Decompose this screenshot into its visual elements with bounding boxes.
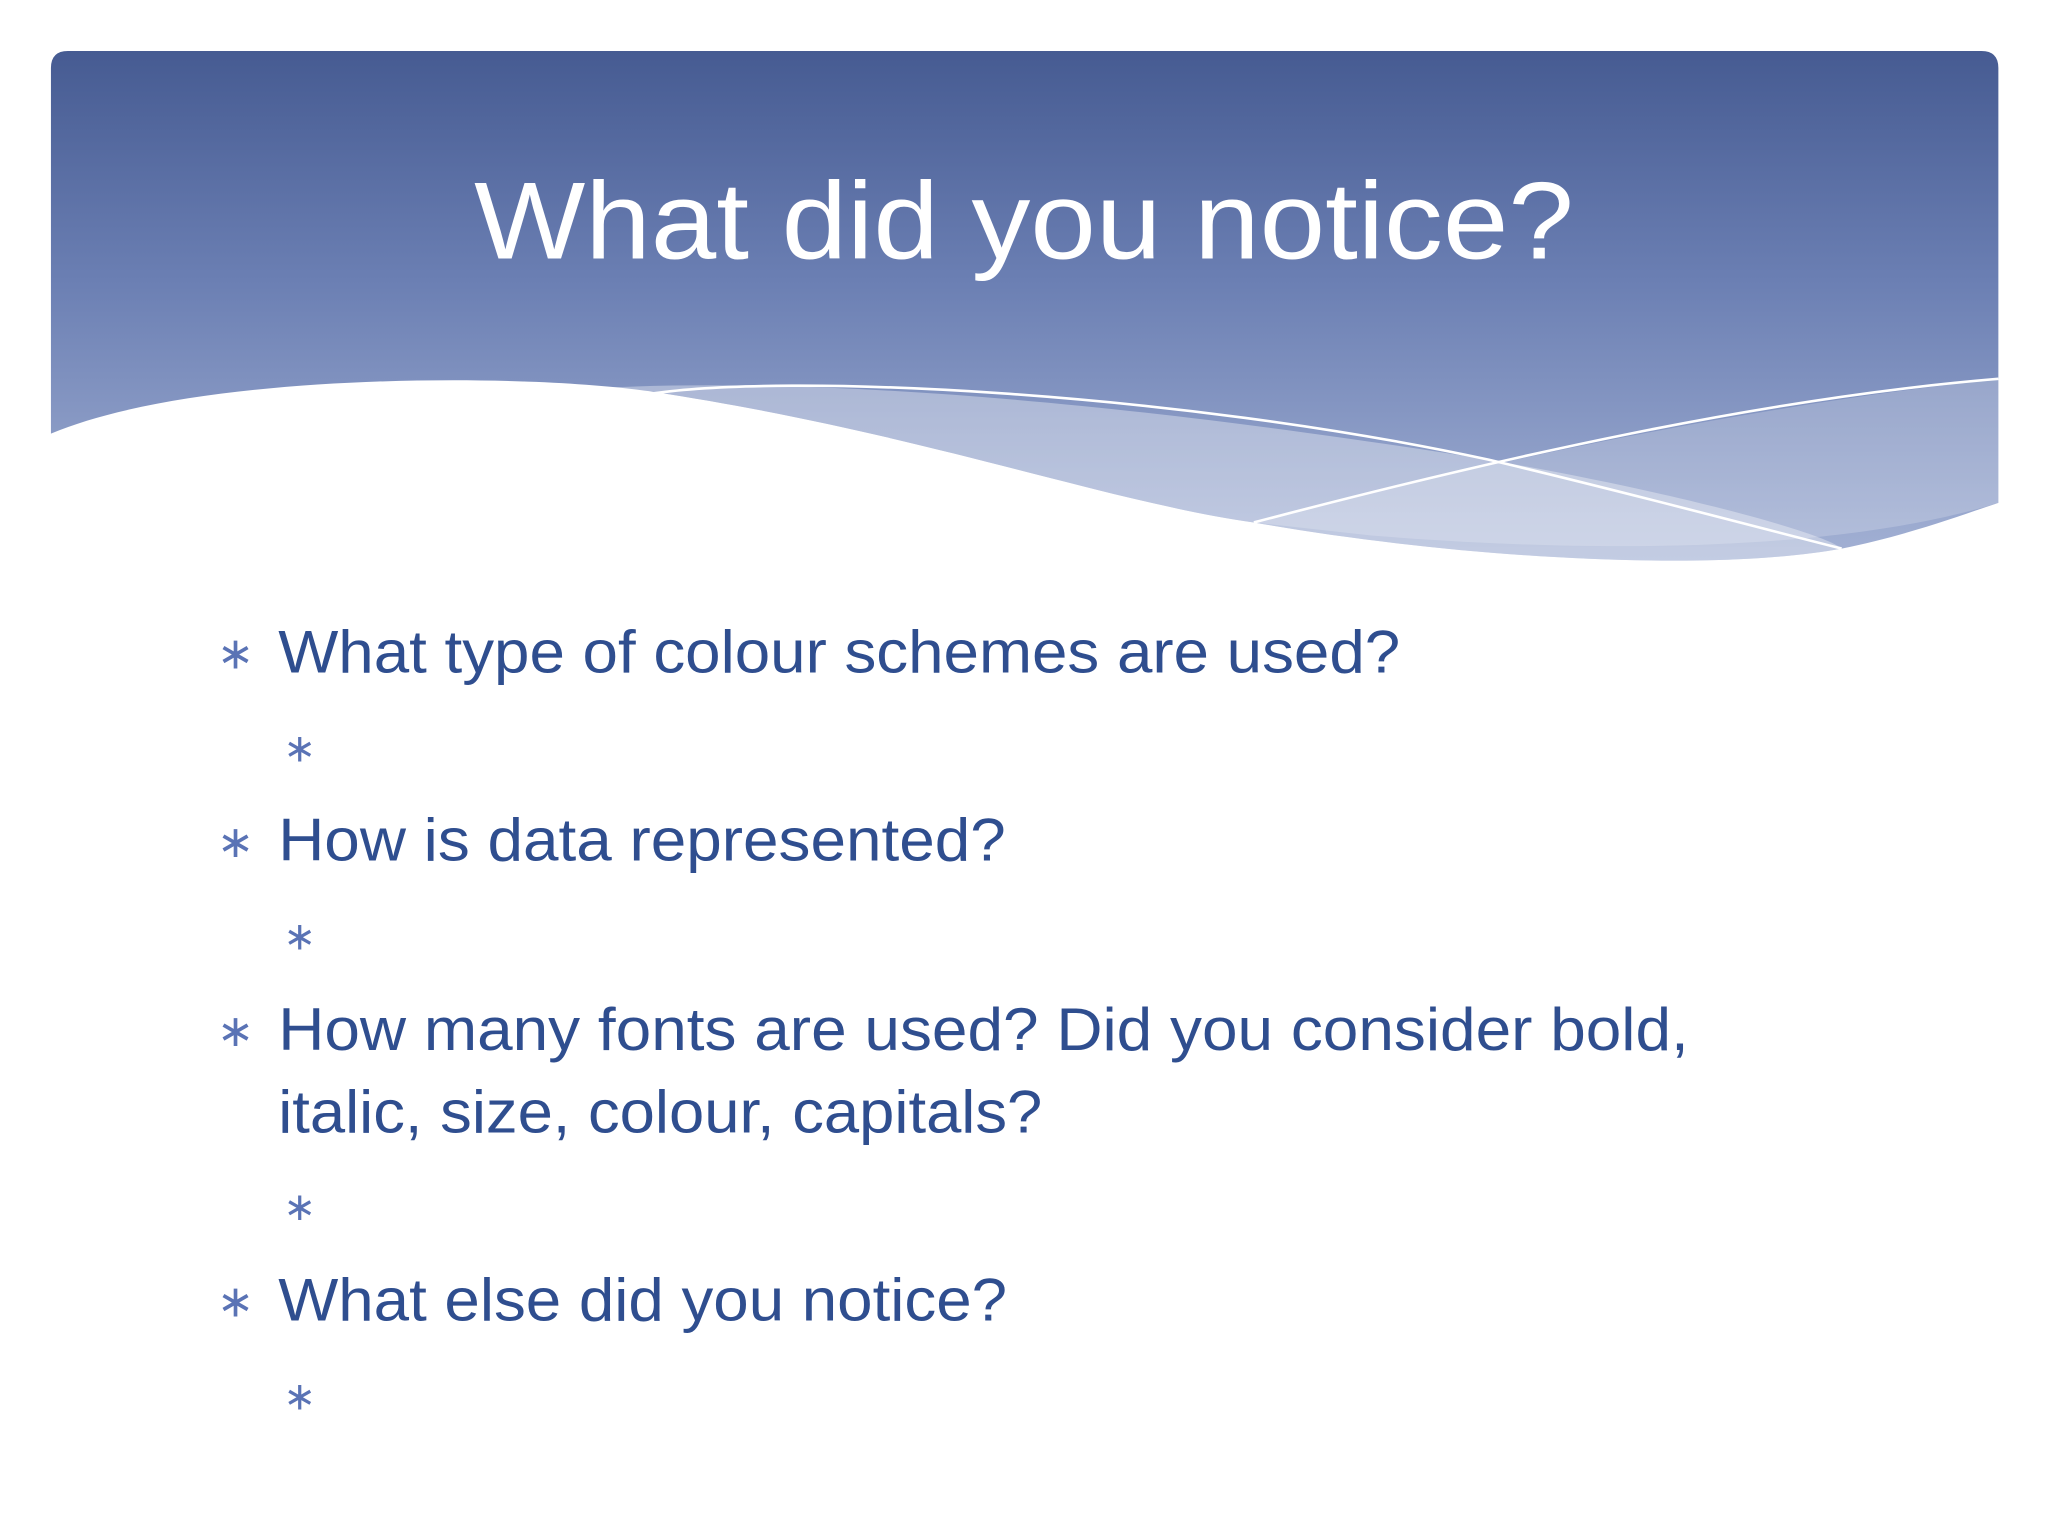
bullet 2: ∗ [217,818,254,867]
bullet 4: What else did you notice? [278,1266,1007,1333]
bullet 3: italic, size, colour, capitals? [278,1078,1042,1145]
sub bullet 1: ∗ [283,727,316,770]
sub bullet 4: ∗ [283,1375,316,1418]
sub bullet 2: ∗ [283,916,316,959]
title: What did you notice? [474,161,1574,283]
bullet 4: ∗ [217,1278,254,1327]
header banner [51,51,1998,561]
bullet 3: How many fonts are used? Did you consider bold, [278,996,1689,1063]
bullet 1: What type of colour schemes are used? [278,619,1400,686]
bullet 3 [217,996,1689,1145]
sub bullet 3: ∗ [283,1186,316,1229]
bullet 3: ∗ [217,1007,254,1056]
bullet 2: How is data represented? [278,807,1006,874]
bullet list [217,619,1689,1418]
bullet 1: ∗ [217,630,254,679]
